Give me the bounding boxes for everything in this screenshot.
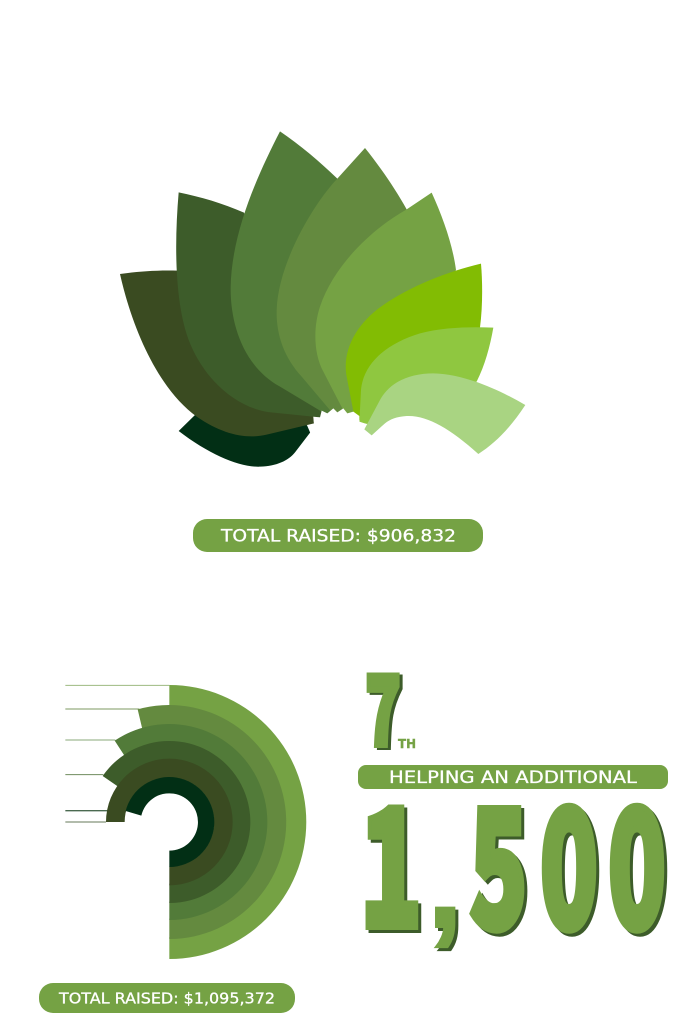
pill: total raised 1,095,372: TOTAL RAISED: $1,095,372 <box>58 990 275 1008</box>
petal 3 <box>176 192 333 423</box>
pill: total raised 1,095,372 <box>39 983 295 1013</box>
ring 2 <box>138 705 286 939</box>
petal 2 <box>120 271 314 436</box>
big number: 1,500 <box>359 736 666 976</box>
big number: 1,500: 0 <box>608 737 666 976</box>
petal 4 <box>231 131 340 420</box>
pill: helping an additional <box>358 765 668 789</box>
petal 1 darkest <box>179 415 311 467</box>
leader lines <box>65 685 169 822</box>
pill: helping an additional: HELPING AN ADDITIONAL <box>389 768 638 787</box>
chart: radial bars <box>65 685 306 959</box>
text: th suffix: TH <box>398 736 416 751</box>
chart: leaf fan <box>120 131 525 467</box>
ring 1 <box>169 685 306 959</box>
ring 4 <box>103 741 250 903</box>
petal 7 bright <box>346 264 482 420</box>
big number: 1,500: 5 <box>469 737 528 976</box>
big number: 1,500: 1 <box>359 736 423 975</box>
pill: total raised 906,832: TOTAL RAISED: $906,832 <box>220 526 456 546</box>
big number: 1,500: 0 <box>540 737 598 976</box>
heading: 7th: 7 <box>365 633 401 773</box>
petal 6 <box>315 193 456 420</box>
ring 3 <box>115 724 267 920</box>
petal 5 <box>277 148 407 420</box>
ring 6 <box>126 777 214 867</box>
ring 5 <box>106 759 233 885</box>
big number: 1,500: , <box>427 809 463 955</box>
petal 8 <box>359 327 493 424</box>
pill: total raised 906,832 <box>193 519 483 552</box>
petal 9 lightest <box>364 373 525 454</box>
